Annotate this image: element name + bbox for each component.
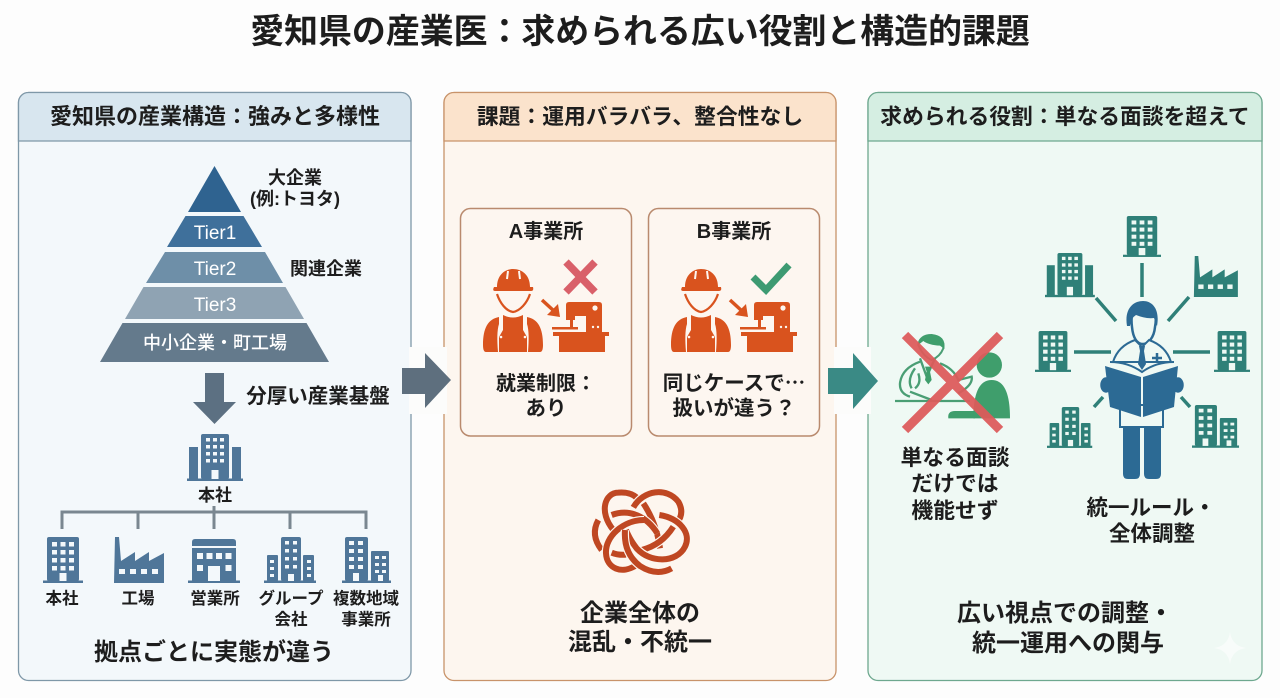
- card: site A: あり: [526, 397, 566, 420]
- panel header: industrial structure: 愛知県の産業構造：強みと多様性: [50, 104, 380, 129]
- label: interview alone does not work: 機能せず: [911, 498, 999, 523]
- site labels: 複数地域: [333, 588, 400, 608]
- label: interview alone does not work: だけでは: [911, 471, 999, 496]
- conclusion: left panel: 拠点ごとに実態が違う: [94, 638, 334, 666]
- label: unified rules and overall coordination: 統一ルール・: [1086, 496, 1216, 520]
- card: site B: B事業所: [697, 220, 771, 243]
- icon: worker and machine A: [483, 269, 609, 352]
- label: interview alone does not work: [900, 445, 1010, 523]
- card: site B: [648, 208, 820, 436]
- panel: issues: [444, 92, 836, 680]
- pyramid label: large companies: [250, 168, 340, 209]
- panel header: issues: [444, 92, 836, 141]
- panel header: issues: 課題：運用バラバラ、整合性なし: [477, 104, 803, 129]
- arrow: left to middle: [402, 347, 451, 414]
- card: site A: 就業制限：: [496, 372, 596, 395]
- conclusion: right panel: 広い視点での調整・: [957, 600, 1173, 627]
- icon: factory: [114, 537, 164, 583]
- org tree connector: [62, 506, 366, 529]
- label: interview alone does not work: 単なる面談: [900, 445, 1010, 470]
- pyramid label: large companies: 大企業: [268, 168, 322, 188]
- site labels: 工場: [122, 589, 154, 608]
- pyramid chart: [100, 166, 329, 362]
- sparkle mark: [1214, 632, 1246, 664]
- icon: head office: [43, 537, 83, 583]
- label: headquarters: 本社: [198, 486, 232, 505]
- site labels: 会社: [274, 610, 308, 629]
- label: unified rules and overall coordination: [1086, 496, 1216, 546]
- card: site B: 扱いが違う？: [672, 396, 796, 420]
- icon: multi-region offices: [342, 537, 391, 583]
- conclusion: right panel: [957, 600, 1173, 657]
- card: site A: A事業所: [509, 220, 583, 243]
- pyramid chart: Tier1: [194, 223, 236, 244]
- panel: industrial structure: [18, 92, 411, 680]
- site labels: 本社: [46, 589, 79, 608]
- site labels: グループ: [258, 588, 324, 608]
- panel: required role: [868, 92, 1262, 680]
- site labels: 事業所: [341, 610, 391, 629]
- icon: consultation crossed out: [895, 334, 1010, 430]
- arrow: down: [193, 373, 236, 424]
- card: site B: 同じケースで…: [663, 366, 805, 396]
- arrow: middle to right: [828, 347, 878, 414]
- label: thick industrial base: 分厚い産業基盤: [246, 385, 390, 408]
- icon: cross: [566, 262, 595, 292]
- pyramid label: large companies: (例:トヨタ): [250, 189, 340, 209]
- pyramid chart: Tier2: [194, 259, 236, 280]
- conclusion: middle panel: [568, 600, 712, 656]
- panel header: required role: [868, 92, 1262, 141]
- icon: sales office: [188, 539, 240, 583]
- site labels: [46, 588, 400, 629]
- conclusion: middle panel: 混乱・不統一: [568, 629, 712, 656]
- pyramid chart: 中小企業・町工場: [143, 333, 287, 353]
- panel header: industrial structure: [18, 92, 411, 141]
- label: unified rules and overall coordination: 全体調整: [1109, 522, 1195, 546]
- panel header: required role: 求められる役割：単なる面談を超えて: [880, 104, 1250, 129]
- conclusion: middle panel: 企業全体の: [580, 600, 700, 627]
- title: 愛知県の産業医：求められる広い役割と構造的課題: [250, 13, 1030, 51]
- icon: check: [753, 265, 789, 290]
- pyramid label: related companies: 関連企業: [290, 259, 362, 279]
- icon: group company: [264, 537, 316, 583]
- icon: occupational physician with book: [1100, 301, 1184, 479]
- icon: worker and machine B: [671, 269, 797, 352]
- conclusion: right panel: 統一運用への関与: [972, 630, 1164, 657]
- site labels: 営業所: [190, 589, 240, 608]
- building network: [1035, 216, 1250, 448]
- icon: headquarters: [187, 434, 243, 481]
- card: site A: [460, 208, 632, 436]
- pyramid chart: Tier3: [194, 295, 236, 316]
- icon: tangled knot: [595, 492, 687, 572]
